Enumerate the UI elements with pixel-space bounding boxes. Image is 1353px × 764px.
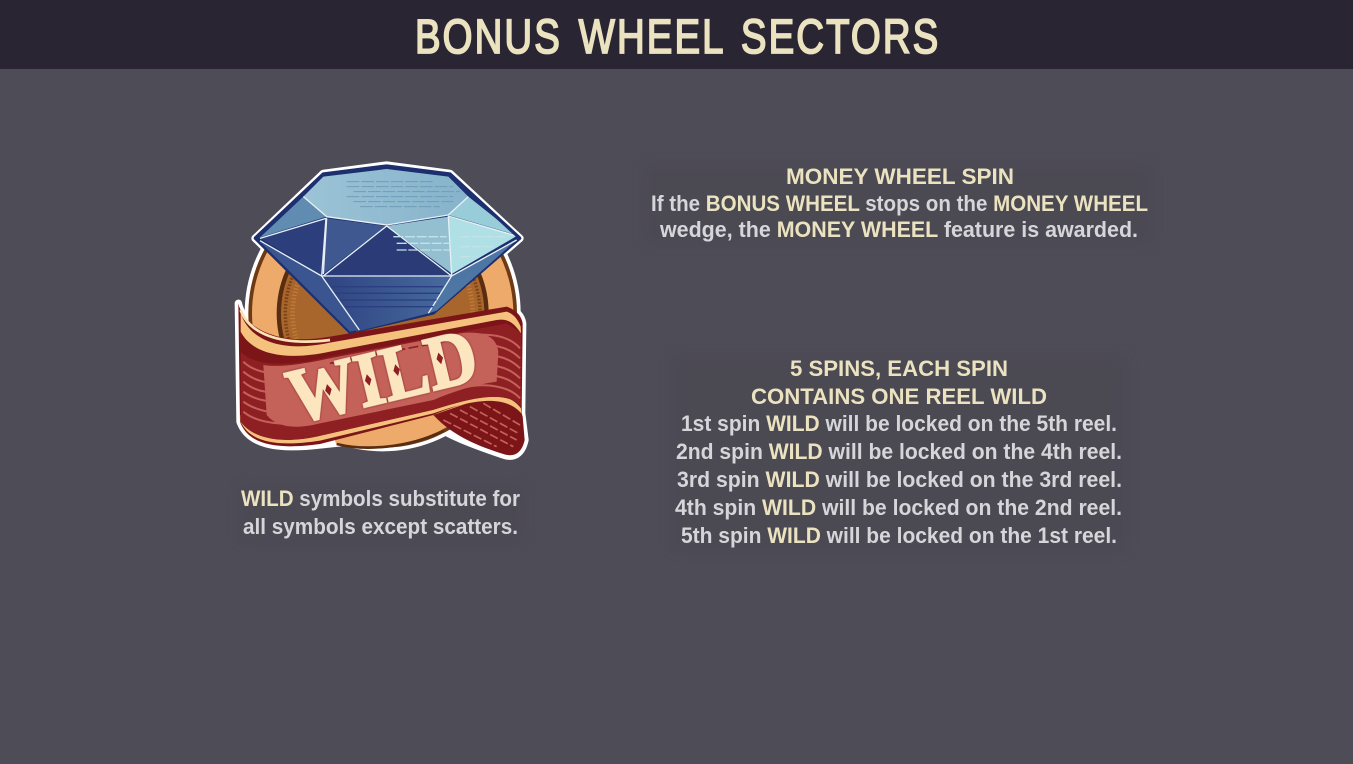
five spins heading line 2: CONTAINS ONE REEL WILD: [751, 384, 1047, 409]
money wheel spin text: [645, 164, 1151, 243]
five spins heading line 1: 5 SPINS, EACH SPIN: [790, 356, 1008, 381]
text backing: [240, 486, 522, 542]
title: BONUS WHEEL SECTORS: [415, 11, 940, 64]
icon outline: [238, 165, 525, 456]
ribbon tail: [433, 396, 525, 455]
spin 1: 1st spin WILD will be locked on the 5th reel.: [681, 411, 1117, 436]
spin 3: 3rd spin WILD will be locked on the 3rd reel.: [677, 467, 1122, 492]
money wheel line 1: If the BONUS WHEEL stops on the MONEY WHEEL: [651, 191, 1148, 216]
gold coin: [248, 179, 517, 449]
spin 5: 5th spin WILD will be locked on the 1st reel.: [681, 523, 1117, 548]
header bar: [0, 0, 1353, 69]
spin 2: 2nd spin WILD will be locked on the 4th reel.: [676, 439, 1122, 464]
money wheel line 2: wedge, the MONEY WHEEL feature is awarded.: [659, 217, 1138, 242]
wild lettering: WILD: [279, 312, 485, 440]
wild line 1: WILD symbols substitute for: [241, 486, 520, 511]
icon: wild diamond symbol: [238, 165, 525, 456]
text backing: [672, 356, 1126, 550]
wild description: [240, 486, 522, 542]
five spins text: [672, 356, 1126, 550]
text backing: [645, 165, 1151, 243]
blue diamond: [255, 166, 520, 333]
spin 4: 4th spin WILD will be locked on the 2nd reel.: [675, 495, 1122, 520]
ribbon band: [238, 303, 523, 446]
wild line 2: all symbols except scatters.: [243, 514, 518, 539]
money wheel heading: MONEY WHEEL SPIN: [786, 164, 1014, 189]
